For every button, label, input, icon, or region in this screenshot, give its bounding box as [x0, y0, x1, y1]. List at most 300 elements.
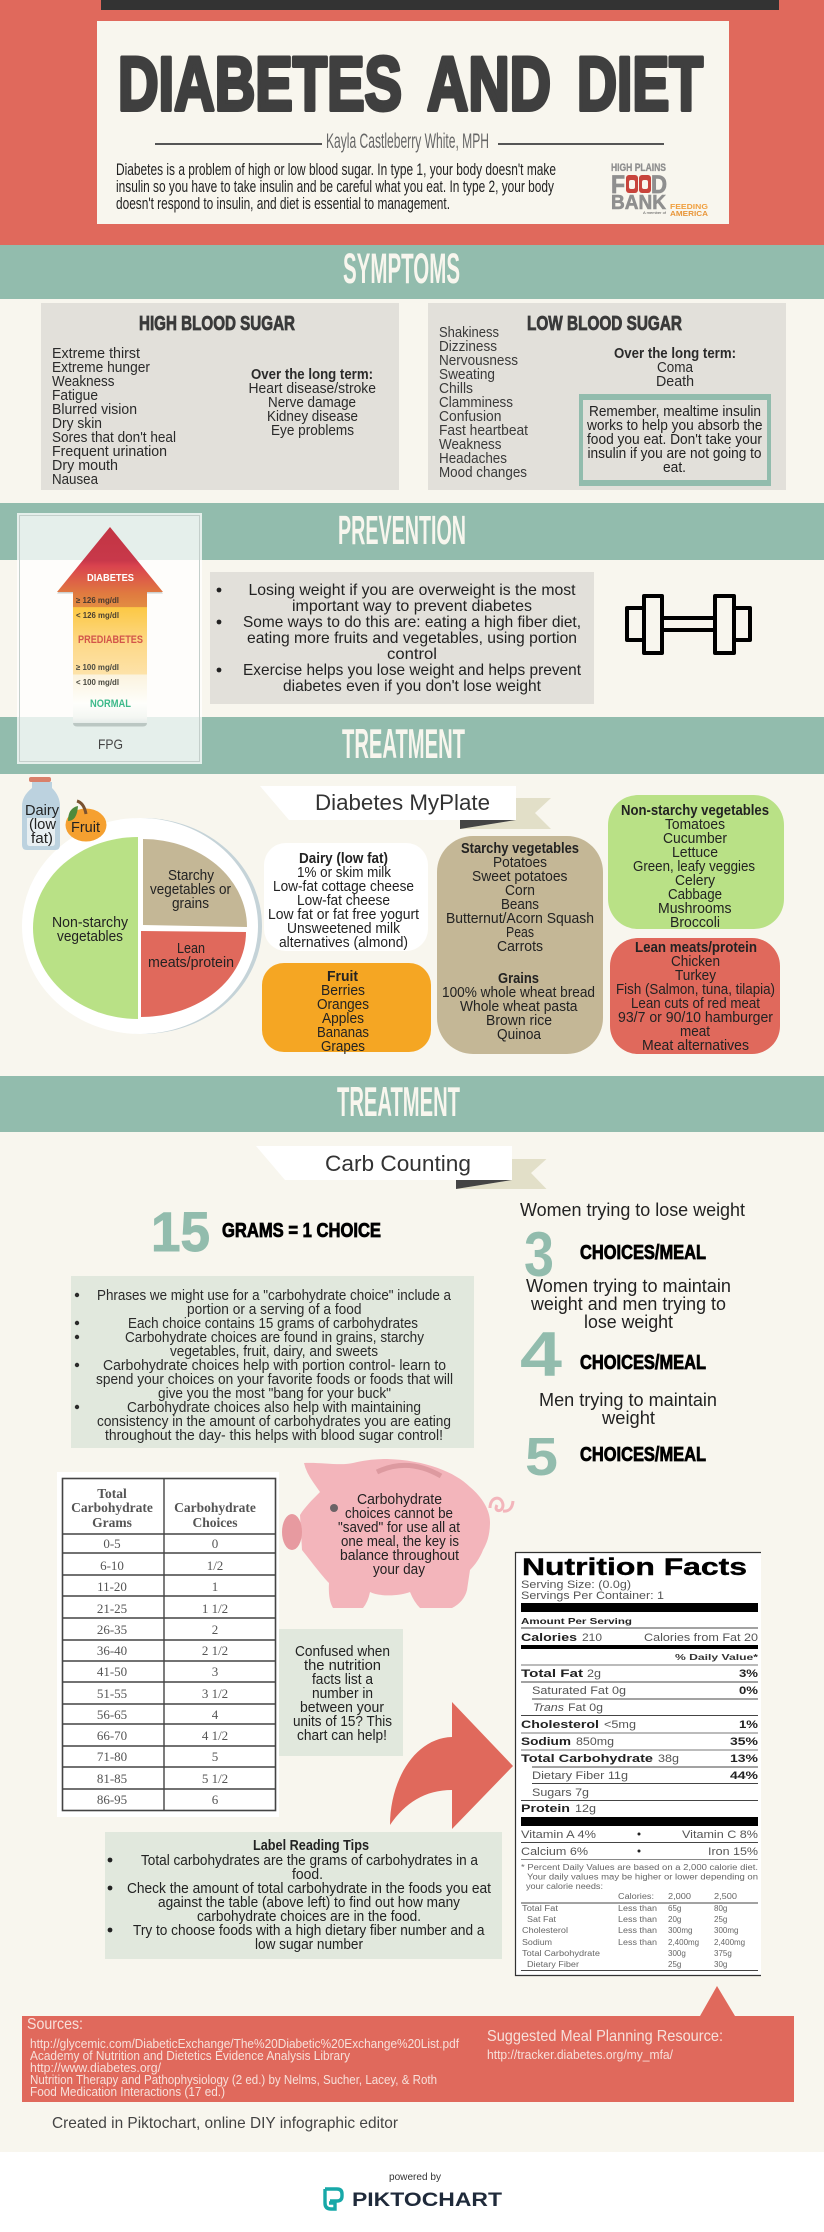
panel: lean meats and protein: 93/7 or 90/10 hamburger	[618, 1010, 773, 1026]
label nutrient rows: 44%	[730, 1770, 758, 1782]
arrow: pointing to nutrition label	[390, 1702, 513, 1829]
panel: label reading tips: carbohydrate choices are in the food.	[197, 1909, 421, 1925]
sources list: Nutrition Therapy and Pathophysiology (2 ed.) by Nelms, Sucher, Lacey, & Roth	[30, 2073, 437, 2087]
list: high blood sugar symptoms: Blurred vision	[52, 402, 137, 418]
label nutrient rows: Total Fat	[521, 1668, 583, 1680]
table: carbohydrate grams to choices: 2 1/2	[202, 1643, 228, 1658]
intro text: doesn't respond to insulin, and diet is essential to management.	[116, 195, 450, 213]
list: high blood sugar symptoms: Extreme hunger	[52, 360, 150, 376]
list: high blood sugar symptoms: Fatigue	[52, 388, 98, 404]
heading band: prevention	[0, 503, 824, 560]
panel: label reading tips: low sugar number	[255, 1937, 363, 1953]
label nutrient rows: Cholesterol	[521, 1719, 599, 1731]
label vitamins: Vitamin C 8%	[682, 1829, 758, 1841]
panel: starchy vegetables and grains	[437, 836, 603, 1054]
panel: lean meats and protein: Meat alternatives	[642, 1038, 749, 1054]
plate section: starchy vegetables or grains	[143, 839, 247, 927]
panel: starchy vegetables and grains: Sweet potatoes	[472, 869, 568, 885]
panel: lean meats and protein	[610, 938, 780, 1054]
panel: carbohydrate choice facts: give you the most "bang for your buck"	[158, 1386, 391, 1402]
list: high blood sugar symptoms: Sores that don't heal	[52, 430, 176, 446]
logo: High Plains Food Bank: FEEDING	[670, 202, 708, 211]
plate section: lean meats	[141, 931, 246, 1017]
label nutrient rows: 850mg	[576, 1736, 614, 1748]
label vitamins: Vitamin A 4%	[521, 1829, 596, 1841]
list: low blood sugar symptoms: Clamminess	[439, 395, 513, 411]
label footnote and daily values: Less than	[618, 1915, 657, 1924]
panel: non-starchy vegetables: Lettuce	[672, 845, 718, 861]
panel: FPG arrow chart	[17, 513, 202, 764]
panel: starchy vegetables and grains: Starchy vegetables	[461, 841, 579, 857]
panel: non-starchy vegetables: Mushrooms	[658, 901, 732, 917]
stat: men maintaining weight: CHOICES/MEAL	[580, 1444, 706, 1466]
stat: women maintaining, men losing: 4	[520, 1320, 562, 1390]
panel: starchy vegetables and grains: Potatoes	[493, 855, 547, 871]
logo: High Plains Food Bank: F	[611, 171, 625, 199]
arrow labels: < 100 mg/dl	[76, 678, 119, 687]
panel: low blood sugar	[428, 303, 786, 490]
list: low blood sugar symptoms: Chills	[439, 381, 473, 397]
heading band: treatment	[0, 717, 824, 774]
plate section: starchy vegetables or grains: Starchy	[168, 868, 215, 884]
panel: starchy vegetables and grains: Beans	[501, 897, 539, 913]
panel: header	[0, 0, 824, 245]
panel: lean meats and protein: Lean meats/protein	[635, 940, 757, 956]
label footnote and daily values: Cholesterol	[522, 1926, 568, 1935]
label footnote and daily values: Sat Fat	[527, 1915, 557, 1924]
list: high blood sugar symptoms: Dry mouth	[52, 458, 118, 474]
list: low blood sugar symptoms: Confusion	[439, 409, 502, 425]
stat: men maintaining weight: Men trying to maintain	[539, 1390, 717, 1410]
list: low blood sugar symptoms: Nervousness	[439, 353, 518, 369]
panel: label reading tips: Check the amount of total carbohydrate in the foods you eat	[127, 1881, 491, 1897]
title: DIABETES	[118, 42, 402, 127]
icon: orange fruit	[66, 801, 106, 842]
table: carbohydrate grams to choices: Total	[97, 1486, 127, 1501]
stat: women trying to lose weight	[520, 1200, 745, 1290]
meal planning resource: Suggested Meal Planning Resource:	[487, 2028, 723, 2045]
panel: prevention tips: diabetes even if you don't lose weight	[283, 678, 542, 695]
label vitamins: Iron 15%	[708, 1846, 758, 1858]
callout: mealtime insulin: food you eat. Don't take your	[587, 432, 762, 448]
label footnote and daily values: 20g	[668, 1915, 681, 1924]
label footnote and daily values: 25g	[668, 1960, 681, 1969]
label nutrient rows: Sugars 7g	[532, 1787, 589, 1799]
table: carbohydrate grams to choices: 41-50	[97, 1664, 127, 1679]
logo: High Plains Food Bank	[611, 162, 709, 218]
label footnote and daily values: Total Carbohydrate	[522, 1949, 601, 1958]
panel: label reading tips	[105, 1832, 502, 1959]
list: low blood sugar symptoms: Fast heartbeat	[439, 423, 528, 439]
panel: prevention tips: important way to prevent diabetes	[292, 598, 532, 615]
panel: non-starchy vegetables	[608, 795, 784, 931]
stat: women trying to lose weight: Women trying to lose weight	[520, 1200, 745, 1220]
panel: dairy foods: Unsweetened milk	[287, 921, 401, 937]
meal planning resource	[487, 2028, 723, 2062]
label nutrient rows: Dietary Fiber 11g	[532, 1770, 628, 1782]
callout: confused by nutrition facts: the nutrition	[304, 1658, 381, 1674]
plate section: non-starchy vegetables	[33, 837, 138, 1019]
panel: dairy foods: Low-fat cheese	[297, 893, 390, 909]
panel: high blood sugar	[41, 303, 399, 490]
label: FPG: FPG	[98, 736, 123, 752]
panel: carbohydrate choice facts: vegetables, fruit, dairy, and sweets	[170, 1344, 378, 1360]
pig text	[338, 1492, 460, 1578]
label footnote and daily values: Your daily values may be higher or lower depending on	[527, 1872, 758, 1882]
panel: prevention tips	[210, 572, 594, 704]
label footnote and daily values: 25g	[714, 1915, 727, 1924]
list: high blood sugar symptoms	[52, 346, 176, 488]
list: high blood sugar symptoms: Extreme thirst	[52, 346, 140, 362]
arrow labels: ≥ 126 mg/dl	[76, 596, 119, 605]
intro text: insulin so you have to take insulin and be careful what you eat. In type 2, your body	[116, 178, 555, 196]
table: carbohydrate grams to choices: 1/2	[207, 1558, 223, 1573]
icon: dairy bottle: (low	[29, 816, 56, 833]
table: carbohydrate grams to choices: 66-70	[97, 1728, 127, 1743]
list: high blood sugar symptoms: Dry skin	[52, 416, 102, 432]
callout: confused by nutrition facts: chart can help!	[297, 1728, 387, 1744]
panel: starchy vegetables and grains: Carrots	[497, 939, 543, 955]
logo: High Plains Food Bank: D	[651, 171, 667, 199]
panel: dairy foods: Dairy (low fat)	[299, 851, 388, 867]
arrow: glucose scale	[57, 527, 163, 726]
label calories: Calories from Fat 20	[644, 1632, 758, 1644]
list: low blood sugar symptoms: Shakiness	[439, 325, 499, 341]
table: carbohydrate grams to choices: 3	[212, 1664, 218, 1679]
stat: men maintaining weight: weight	[601, 1408, 655, 1428]
label nutrient rows: 2g	[587, 1668, 601, 1680]
label nutrient rows: Trans	[533, 1702, 565, 1714]
panel: non-starchy vegetables: Green, leafy veggies	[633, 859, 755, 875]
logo: High Plains Food Bank: BANK	[611, 192, 667, 214]
table: carbohydrate grams to choices: 4	[212, 1707, 219, 1722]
logo: powered by Piktochart: powered by	[389, 2171, 442, 2183]
panel: dairy foods: Low fat or fat free yogurt	[268, 907, 419, 923]
label footnote and daily values: 30g	[714, 1960, 727, 1969]
logo: High Plains Food Bank: A member of	[643, 210, 667, 215]
stat: women trying to lose weight: 3	[524, 1220, 554, 1290]
table: carbohydrate grams to choices: 0-5	[103, 1536, 121, 1551]
sources list: http://www.diabetes.org/	[30, 2061, 162, 2075]
label footnote and daily values: Less than	[618, 1938, 657, 1947]
list: long term low blood sugar: Death	[656, 374, 694, 390]
table: carbohydrate grams to choices: 0	[212, 1536, 218, 1551]
list: low blood sugar symptoms: Dizziness	[439, 339, 497, 355]
panel: nutrition facts label	[515, 1552, 761, 1976]
stat: women trying to lose weight: CHOICES/MEAL	[580, 1242, 706, 1264]
list: long term high blood sugar: Heart disease/stroke	[248, 381, 376, 397]
plate section: non-starchy vegetables: vegetables	[57, 929, 123, 945]
label vitamins	[521, 1829, 758, 1860]
label footnote and daily values: 300g	[668, 1949, 686, 1958]
title: AND	[427, 42, 551, 127]
sources list: Sources:	[27, 2016, 83, 2033]
table: carbohydrate grams to choices: 6	[212, 1792, 219, 1807]
label footnote and daily values: Total Fat	[522, 1904, 559, 1913]
title	[118, 42, 703, 127]
pig text: your day	[373, 1562, 426, 1578]
panel: starchy vegetables and grains: Grains	[498, 971, 539, 987]
list: low blood sugar symptoms: Weakness	[439, 437, 502, 453]
label nutrient rows: 38g	[658, 1753, 679, 1765]
panel: starchy vegetables and grains: Butternut/Acorn Squash	[446, 911, 594, 927]
label footnote and daily values: Calories:	[618, 1892, 654, 1901]
callout: mealtime insulin: works to help you absorb the	[586, 418, 762, 434]
label nutrient rows: 12g	[575, 1803, 596, 1815]
table: carbohydrate grams to choices: Choices	[192, 1515, 238, 1530]
table: carbohydrate grams to choices: 1	[212, 1579, 218, 1594]
label nutrient rows: Saturated Fat 0g	[532, 1685, 626, 1697]
logo: High Plains Food Bank: AMERICA	[670, 209, 709, 218]
arrow labels: PREDIABETES	[78, 634, 143, 646]
table: carbohydrate grams to choices: Carbohydrate	[71, 1500, 153, 1515]
panel: dairy foods: Low-fat cottage cheese	[273, 879, 414, 895]
heading: low blood sugar: LOW BLOOD SUGAR	[527, 313, 682, 335]
stat: 15 grams = 1 choice: GRAMS = 1 CHOICE	[222, 1220, 381, 1242]
arrow labels: DIABETES	[87, 572, 134, 584]
pig text: balance throughout	[340, 1548, 459, 1564]
panel: prevention tips: Exercise helps you lose weight and helps prevent	[243, 662, 582, 679]
panel: starchy vegetables and grains: 100% whole wheat bread	[442, 985, 595, 1001]
heading band: symptoms: SYMPTOMS	[343, 245, 460, 293]
panel: nutrition facts label: % Daily Value*	[675, 1652, 759, 1662]
label footnote and daily values: Dietary Fiber	[527, 1960, 579, 1969]
list: long term low blood sugar: Over the long term:	[614, 346, 736, 362]
label footnote and daily values: Sodium	[522, 1938, 552, 1947]
label footnote and daily values: your calorie needs:	[526, 1882, 603, 1891]
table: carbohydrate grams to choices: 5	[212, 1749, 218, 1764]
label nutrient rows: 3%	[739, 1668, 758, 1680]
panel: prevention tips: Losing weight if you are overweight is the most	[248, 582, 576, 599]
list: long term low blood sugar: Coma	[657, 360, 694, 376]
banner: Carb Counting: Carb Counting	[325, 1151, 471, 1176]
heading band: treatment (carb counting)	[0, 1076, 824, 1132]
label footnote and daily values: 2,400mg	[714, 1938, 745, 1947]
panel: fruit foods: Berries	[321, 983, 365, 999]
panel: carbohydrate choice facts: spend your choices on your favorite foods or foods that will	[96, 1372, 453, 1388]
stat: 15 grams = 1 choice	[151, 1200, 381, 1263]
list: long term high blood sugar: Over the long term:	[251, 367, 373, 383]
list: long term low blood sugar	[614, 346, 736, 390]
list: high blood sugar symptoms: Frequent urination	[52, 444, 167, 460]
table: carbohydrate grams to choices: 51-55	[97, 1686, 127, 1701]
panel: sources footer	[22, 1986, 794, 2102]
label footnote and daily values: * Percent Daily Values are based on a 2,000 calorie diet.	[521, 1863, 758, 1872]
callout: mealtime insulin: insulin if you are not going to	[588, 446, 762, 462]
label nutrient rows: 1%	[739, 1719, 758, 1731]
heading: high blood sugar: HIGH BLOOD SUGAR	[139, 313, 295, 335]
list: low blood sugar symptoms: Mood changes	[439, 465, 527, 481]
icon: dumbbell	[627, 596, 750, 653]
pig text: "saved" for use all at	[338, 1520, 460, 1536]
panel: lean meats and protein: meat	[680, 1024, 710, 1040]
panel: starchy vegetables and grains: Brown rice	[486, 1013, 552, 1029]
list: high blood sugar symptoms: Weakness	[52, 374, 114, 390]
panel: label reading tips: Label Reading Tips	[253, 1838, 369, 1854]
panel: fruit foods: Apples	[322, 1011, 364, 1027]
panel: lean meats and protein: Turkey	[675, 968, 717, 984]
panel: fruit foods: Grapes	[321, 1039, 365, 1055]
list: long term high blood sugar	[248, 367, 376, 439]
list: high blood sugar symptoms: Nausea	[52, 472, 99, 488]
label vitamins: Calcium 6%	[521, 1846, 588, 1858]
label footnote and daily values: 65g	[668, 1904, 681, 1913]
banner: Carb Counting	[256, 1146, 546, 1189]
callout: mealtime insulin: Remember, mealtime insulin	[589, 404, 761, 420]
panel: starchy vegetables and grains: Quinoa	[497, 1027, 542, 1043]
sources list: Academy of Nutrition and Dietetics Evidence Analysis Library	[30, 2049, 351, 2063]
icon: dairy bottle: fat)	[31, 830, 53, 847]
table: carbohydrate grams to choices: 1 1/2	[202, 1601, 228, 1616]
callout: confused by nutrition facts	[279, 1629, 403, 1756]
callout: mealtime insulin	[579, 394, 771, 486]
list: long term high blood sugar: Nerve damage	[268, 395, 356, 411]
chart: MyPlate plate	[22, 818, 262, 1034]
label footnote and daily values	[521, 1863, 758, 1971]
arrow labels: NORMAL	[90, 698, 131, 710]
table: carbohydrate grams to choices: 26-35	[97, 1622, 127, 1637]
panel: carbohydrate choice facts: Carbohydrate choices are found in grains, starchy	[125, 1330, 425, 1346]
table: carbohydrate grams to choices: 6-10	[100, 1558, 124, 1573]
label footnote and daily values: 2,500	[714, 1892, 738, 1901]
panel: lean meats and protein: Chicken	[671, 954, 720, 970]
callout: confused by nutrition facts: Confused when	[295, 1644, 390, 1660]
icon: orange fruit: Fruit	[71, 819, 101, 836]
stat: 15 grams = 1 choice: 15	[151, 1200, 210, 1263]
stat: women maintaining, men losing: Women trying to maintain	[526, 1276, 731, 1296]
stat: women maintaining, men losing: weight and men trying to	[530, 1294, 726, 1314]
panel: non-starchy vegetables: Celery	[675, 873, 716, 889]
table: carbohydrate grams to choices: 81-85	[97, 1771, 127, 1786]
table: carbohydrate grams to choices: 21-25	[97, 1601, 127, 1616]
panel: fruit foods: Bananas	[317, 1025, 369, 1041]
banner: Diabetes MyPlate	[260, 786, 551, 829]
panel: non-starchy vegetables: Tomatoes	[665, 817, 725, 833]
sources list: Food Medication Interactions (17 ed.)	[30, 2085, 225, 2099]
panel: carbohydrate choice facts: consistency in the amount of carbohydrates you are eating	[97, 1414, 451, 1430]
callout: mealtime insulin: eat.	[663, 460, 686, 476]
banner: Diabetes MyPlate: Diabetes MyPlate	[315, 790, 490, 815]
table: carbohydrate grams to choices: 11-20	[97, 1579, 127, 1594]
callout: confused by nutrition facts: units of 15? This	[293, 1714, 392, 1730]
panel: dairy foods: 1% or skim milk	[297, 865, 392, 881]
panel: label reading tips: food.	[292, 1867, 323, 1883]
list: low blood sugar symptoms: Headaches	[439, 451, 507, 467]
logo: High Plains Food Bank: HIGH PLAINS	[611, 162, 666, 174]
label calories: 210	[582, 1632, 602, 1644]
panel: dairy foods	[264, 843, 428, 951]
panel: carbohydrate choice facts: throughout the day- this helps with blood sugar control!	[105, 1428, 443, 1444]
list: low blood sugar symptoms	[439, 325, 528, 481]
table: carbohydrate grams to choices	[57, 1472, 279, 1817]
label footnote and daily values: 80g	[714, 1904, 727, 1913]
panel: dairy foods: alternatives (almond)	[279, 935, 408, 951]
logo: powered by Piktochart	[325, 2171, 502, 2211]
plate section: non-starchy vegetables: Non-starchy	[52, 915, 129, 931]
label footnote and daily values: Less than	[618, 1926, 657, 1935]
panel: fruit foods: Fruit	[327, 969, 358, 985]
panel: non-starchy vegetables: Cabbage	[668, 887, 722, 903]
panel: nutrition facts label: Servings Per Container: 1	[521, 1590, 664, 1602]
icon: dairy bottle: Dairy	[25, 802, 59, 819]
table: carbohydrate grams to choices: 5 1/2	[202, 1771, 228, 1786]
stat: women maintaining, men losing	[520, 1276, 731, 1390]
credit line: Created in Piktochart, online DIY infographic editor	[52, 2115, 399, 2132]
plate section: lean meats: Lean	[177, 941, 205, 957]
label nutrient rows	[521, 1668, 758, 1815]
panel: prevention tips: eating more fruits and vegetables, using portion	[247, 630, 577, 647]
panel: carbohydrate choice facts: Phrases we might use for a "carbohydrate choice" include a	[97, 1288, 452, 1304]
list: low blood sugar symptoms: Sweating	[439, 367, 495, 383]
panel: label reading tips: against the table (above left) to find out how many	[158, 1895, 461, 1911]
panel: carbohydrate choice facts: Carbohydrate choices help with portion control- learn to	[103, 1358, 446, 1374]
callout: confused by nutrition facts: number in	[312, 1686, 373, 1702]
panel: starchy vegetables and grains: Peas	[506, 925, 534, 941]
label nutrient rows: Fat 0g	[568, 1702, 603, 1714]
panel: fruit foods: Oranges	[317, 997, 369, 1013]
arrow labels: < 126 mg/dl	[76, 611, 119, 620]
stat: men maintaining weight	[525, 1390, 717, 1487]
stat: men maintaining weight: 5	[525, 1427, 558, 1487]
heading band: symptoms	[0, 245, 824, 299]
logo: powered by Piktochart: PIKTOCHART	[352, 2190, 502, 2211]
plate section: starchy vegetables or grains: vegetables or	[150, 882, 231, 898]
pig text: choices cannot be	[345, 1506, 453, 1522]
label footnote and daily values: 300mg	[714, 1926, 738, 1935]
author byline: Kayla Castleberry White, MPH	[326, 130, 489, 153]
panel: carbohydrate choice facts: Each choice contains 15 grams of carbohydrates	[128, 1316, 418, 1332]
heading band: treatment: TREATMENT	[342, 720, 465, 767]
label footnote and daily values: Less than	[618, 1904, 657, 1913]
plate section: starchy vegetables or grains: grains	[172, 896, 209, 912]
table: carbohydrate grams to choices: Carbohydrate	[174, 1500, 256, 1515]
arrow labels: ≥ 100 mg/dl	[76, 663, 119, 672]
table: carbohydrate grams to choices: Grams	[92, 1515, 132, 1530]
stat: women maintaining, men losing: lose weight	[584, 1312, 673, 1332]
icon: Piktochart mark	[325, 2189, 342, 2209]
arrow labels	[76, 572, 143, 710]
pig text: Carbohydrate	[357, 1492, 442, 1508]
panel: non-starchy vegetables: Broccoli	[670, 915, 720, 931]
panel: carbohydrate choice facts: Carbohydrate choices also help with maintaining	[127, 1400, 421, 1416]
panel: nutrition facts label: Serving Size: (0.0g)	[521, 1579, 631, 1591]
label nutrient rows: 13%	[730, 1753, 758, 1765]
list: long term high blood sugar: Eye problems	[271, 423, 354, 439]
icon: dairy bottle	[22, 777, 60, 850]
heading band: prevention: PREVENTION	[338, 507, 466, 553]
title: DIET	[577, 42, 703, 127]
panel: fruit foods	[262, 963, 431, 1055]
panel: starchy vegetables and grains: Corn	[505, 883, 535, 899]
panel: label reading tips: Try to choose foods with a high dietary fiber number and a	[133, 1923, 485, 1939]
panel: label reading tips: Total carbohydrates are the grams of carbohydrates in a	[141, 1853, 479, 1869]
label nutrient rows: <5mg	[604, 1719, 636, 1731]
intro text: Diabetes is a problem of high or low blood sugar. In type 1, your body doesn't make	[116, 161, 556, 179]
table: carbohydrate grams to choices: 4 1/2	[202, 1728, 228, 1743]
list: long term high blood sugar: Kidney disease	[267, 409, 358, 425]
table: carbohydrate grams to choices: 3 1/2	[202, 1686, 228, 1701]
panel: prevention tips: control	[387, 646, 437, 663]
label nutrient rows: Total Carbohydrate	[521, 1753, 653, 1765]
label footnote and daily values: 300mg	[668, 1926, 692, 1935]
sources list: http://glycemic.com/DiabeticExchange/The%20Diabetic%20Exchange%20List.pdf	[30, 2037, 459, 2051]
panel: non-starchy vegetables: Cucumber	[663, 831, 727, 847]
stat: women maintaining, men losing: CHOICES/MEAL	[580, 1352, 706, 1374]
table: carbohydrate grams to choices: 56-65	[97, 1707, 127, 1722]
plate section: lean meats: meats/protein	[148, 955, 234, 971]
panel: starchy vegetables and grains: Whole wheat pasta	[460, 999, 578, 1015]
table: carbohydrate grams to choices: 86-95	[97, 1792, 127, 1807]
